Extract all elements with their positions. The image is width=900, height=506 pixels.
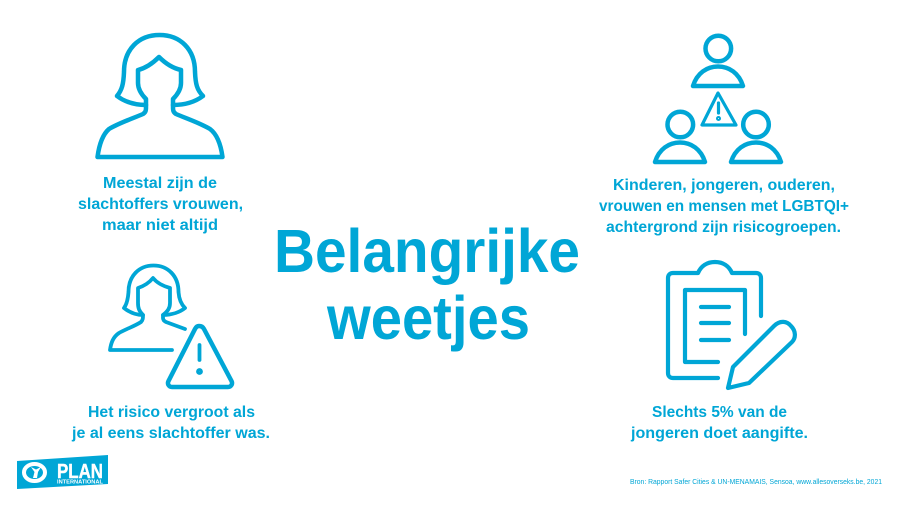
panel: reporting rate (630, 262, 808, 442)
text: victims: slachtoffers vrouwen, (78, 196, 243, 213)
icon: woman with warning triangle (110, 266, 232, 387)
text: risk groups (599, 177, 849, 236)
text: reporting: jongeren doet aangifte. (630, 425, 808, 442)
text: risk groups: vrouwen en mensen met LGBTQI+ (599, 198, 849, 215)
text: risk groups: Kinderen, jongeren, ouderen, (613, 177, 835, 194)
panel: victims are mostly women (78, 35, 243, 234)
panel: risk groups (599, 36, 849, 236)
text: victims (78, 175, 243, 234)
icon: three people with warning triangle (655, 36, 781, 162)
text: repeat risk: Het risico vergroot als (88, 404, 255, 421)
text: repeat risk (71, 404, 270, 442)
text: reporting: Slechts 5% van de (652, 404, 787, 421)
logo: Plan International: INTERNATIONAL (57, 480, 103, 486)
logo: Plan International: PLAN (57, 461, 103, 483)
icon: woman (98, 35, 222, 157)
title: weetjes (326, 284, 530, 352)
text: repeat risk: je al eens slachtoffer was. (71, 425, 270, 442)
title (274, 217, 580, 352)
text: risk groups: achtergrond zijn risicogroepen. (606, 219, 841, 236)
title: Belangrijke (274, 217, 580, 285)
logo: Plan International (17, 455, 108, 489)
panel: repeat victimisation risk (71, 266, 270, 442)
text: victims: maar niet altijd (102, 217, 218, 234)
text: victims: Meestal zijn de (103, 175, 217, 192)
icon: clipboard with pencil (668, 262, 795, 388)
text: reporting (630, 404, 808, 442)
